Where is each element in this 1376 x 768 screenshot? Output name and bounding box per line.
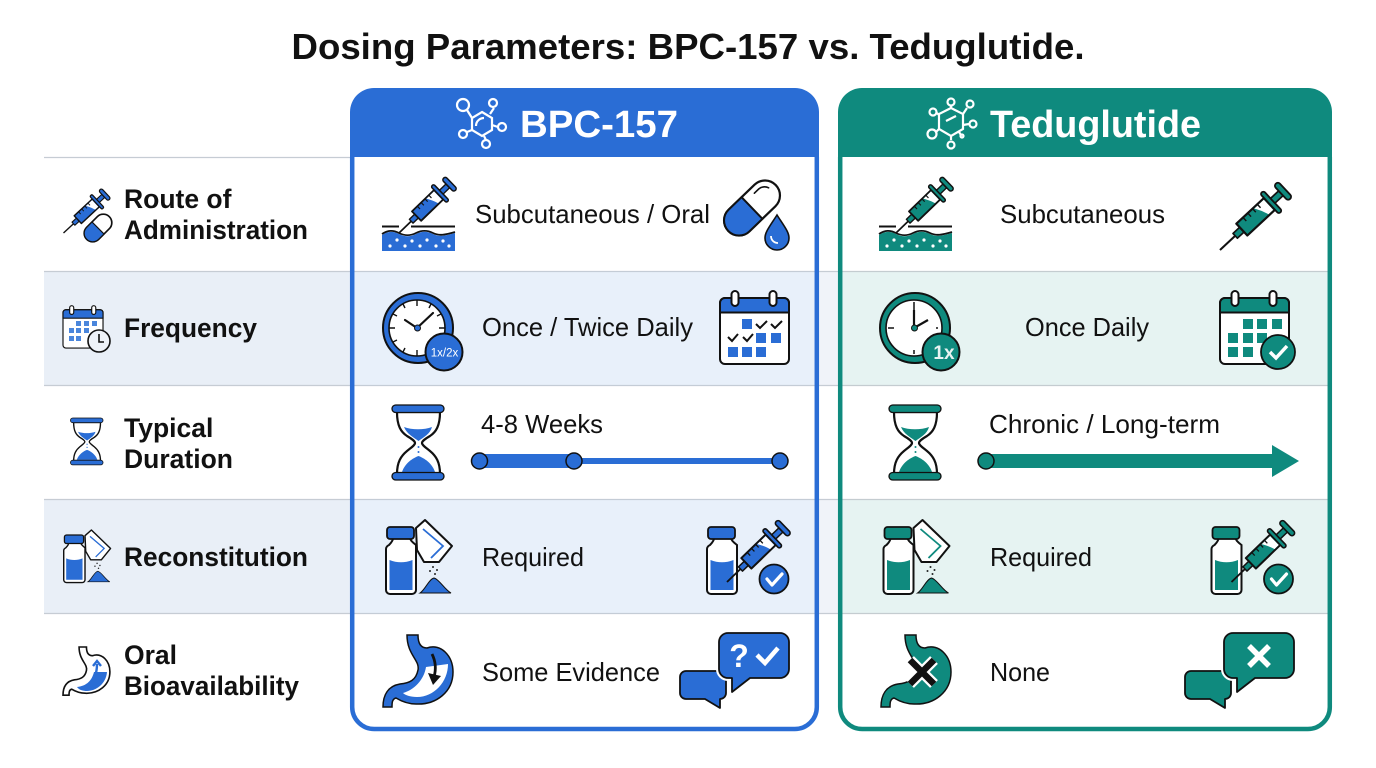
row label: oral bioavailability: Oral xyxy=(124,640,177,670)
title: Dosing Parameters: BPC-157 vs. Teduglutide. xyxy=(292,26,1084,67)
row label: typical duration: Duration xyxy=(124,444,233,474)
row label: frequency xyxy=(63,306,257,352)
row: reconstitution BPC: Required xyxy=(482,542,584,572)
row label: route of administration: Administration xyxy=(124,215,308,245)
icon: vial and powder xyxy=(884,520,950,594)
icon: vial and powder xyxy=(64,530,111,583)
icon: hourglass xyxy=(889,405,941,480)
row label: typical duration xyxy=(70,413,233,474)
icon: molecule xyxy=(928,98,976,148)
row: duration Teduglutide: Chronic / Long-term xyxy=(989,409,1220,439)
icon: hourglass xyxy=(392,405,444,480)
row: oral Teduglutide xyxy=(881,633,1294,708)
icon: chat bubbles X xyxy=(1185,633,1294,708)
icon: calendar with checks xyxy=(720,291,789,364)
icon: clock with 1x badge: 1x xyxy=(933,343,955,364)
row label: reconstitution: Reconstitution xyxy=(124,542,308,572)
icon: chat bubbles question and check: ? xyxy=(729,638,749,674)
row: oral BPC xyxy=(383,633,789,708)
icon: chat bubbles question and check xyxy=(680,633,789,708)
frame Teduglutide xyxy=(840,157,1330,729)
icon: hourglass xyxy=(70,418,103,465)
icon: syringe xyxy=(1211,179,1294,260)
arrow: long-term xyxy=(978,445,1299,477)
row label: oral bioavailability xyxy=(63,640,299,701)
row: frequency BPC: Once / Twice Daily xyxy=(482,312,693,342)
icon: stomach with X xyxy=(881,635,951,707)
row: oral BPC: Some Evidence xyxy=(482,657,660,687)
icon: vial and powder xyxy=(386,520,452,594)
row label: route of administration xyxy=(57,184,308,245)
icon: clock with 1x badge xyxy=(880,293,960,370)
icon: vial syringe check xyxy=(707,517,793,594)
row: route BPC: Subcutaneous / Oral xyxy=(475,199,710,229)
icon: stomach absorption xyxy=(63,647,110,695)
row: reconstitution Teduglutide xyxy=(884,517,1298,594)
header: Teduglutide xyxy=(838,88,1332,157)
icon: molecule xyxy=(457,99,506,148)
icon: capsule and drop xyxy=(718,174,789,250)
row: duration Teduglutide xyxy=(889,405,1299,480)
icon: calendar with check badge xyxy=(1220,291,1295,369)
icon: calendar and clock xyxy=(63,306,110,352)
timeline 4-8 weeks xyxy=(472,453,788,469)
panel: BPC-157 xyxy=(350,88,819,729)
frame BPC xyxy=(352,157,817,729)
header: BPC-157: BPC-157 xyxy=(520,104,678,146)
header: BPC-157 xyxy=(350,88,819,157)
row: route Teduglutide xyxy=(879,175,1294,260)
row: duration BPC: 4-8 Weeks xyxy=(481,409,603,439)
row: frequency BPC xyxy=(383,291,789,370)
panel: row labels xyxy=(44,158,838,701)
row: frequency Teduglutide xyxy=(880,291,1295,370)
row: reconstitution Teduglutide: Required xyxy=(990,542,1092,572)
icon: clock with 1x/2x badge xyxy=(383,293,462,370)
icon: subcutaneous injection xyxy=(879,175,956,251)
panel: Teduglutide xyxy=(838,88,1332,729)
row label: frequency: Frequency xyxy=(124,313,257,343)
row: route BPC xyxy=(382,174,789,251)
row label: reconstitution xyxy=(64,530,308,583)
row label: route of administration: Route of xyxy=(124,184,232,214)
row label: oral bioavailability: Bioavailability xyxy=(124,671,299,701)
row: duration BPC xyxy=(392,405,788,480)
icon: stomach with arrow xyxy=(383,635,453,707)
icon: vial syringe check xyxy=(1212,517,1298,594)
row: frequency Teduglutide: Once Daily xyxy=(1025,312,1149,342)
row: reconstitution BPC xyxy=(386,517,793,594)
icon: subcutaneous injection xyxy=(382,175,459,251)
header: Teduglutide: Teduglutide xyxy=(990,104,1201,146)
icon: syringe and pill xyxy=(57,187,115,245)
row label: typical duration: Typical xyxy=(124,413,213,443)
row: route Teduglutide: Subcutaneous xyxy=(1000,199,1165,229)
icon: clock with 1x/2x badge: 1x/2x xyxy=(431,348,458,360)
row: oral Teduglutide: None xyxy=(990,657,1050,687)
